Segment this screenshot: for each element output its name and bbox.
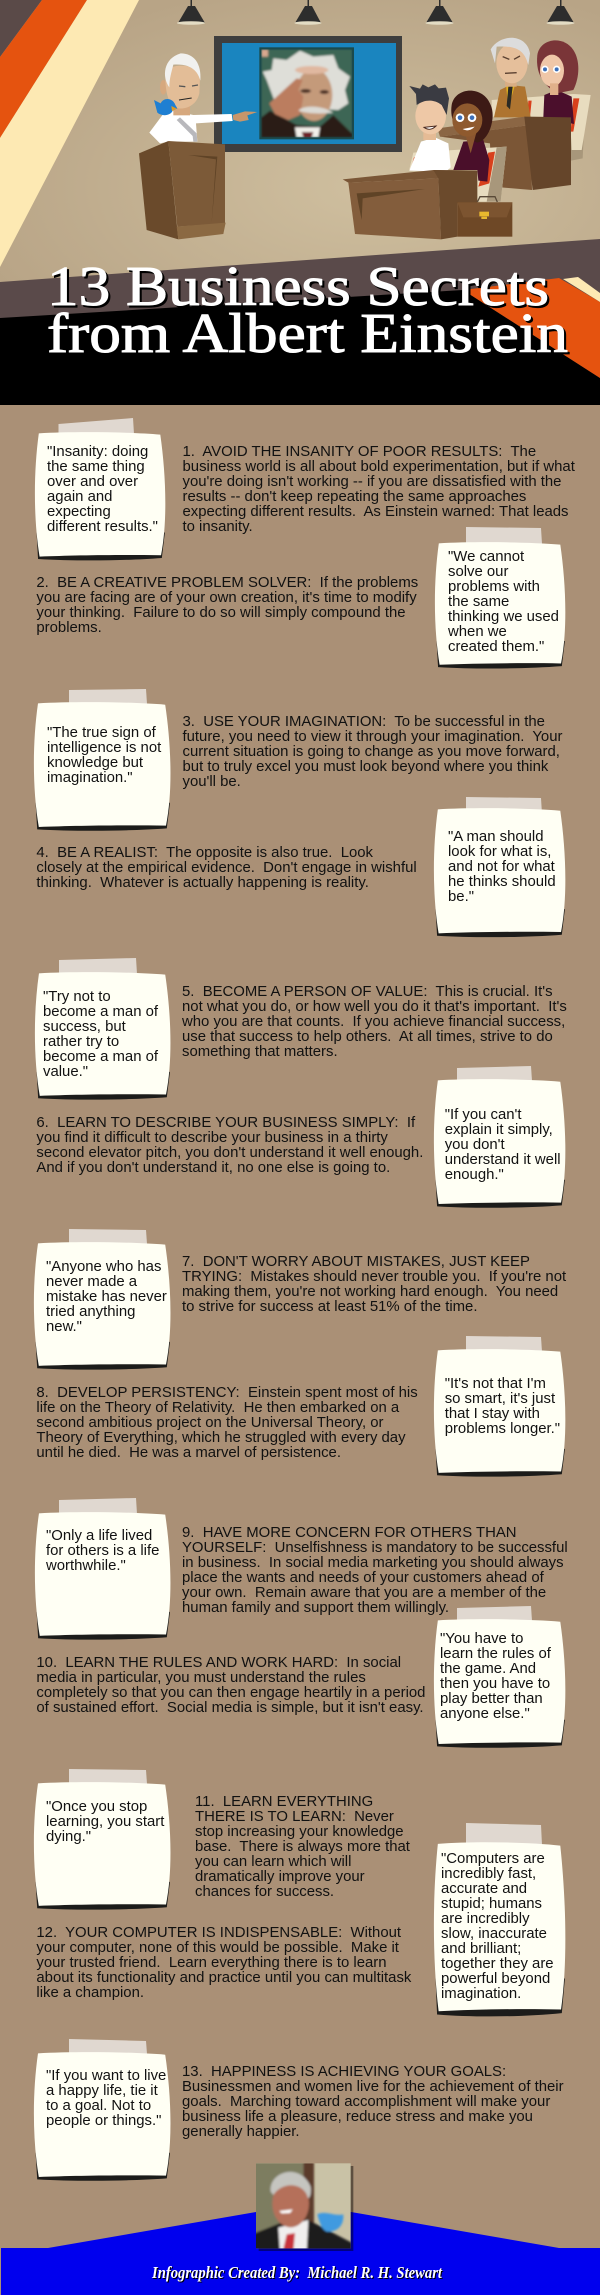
secret 4 text: 4. BE A REALIST: The opposite is also true. Look	[36, 845, 374, 861]
note: computers quote: accurate and	[441, 1881, 527, 1897]
secret 12 text: 12. YOUR COMPUTER IS INDISPENSABLE: Without	[36, 1925, 402, 1941]
secret 13 text: generally happier.	[182, 2124, 300, 2140]
note: computers quote: together they are	[441, 1956, 554, 1972]
secret 2 text: 2. BE A CREATIVE PROBLEM SOLVER: If the problems	[36, 575, 418, 591]
title	[47, 256, 570, 367]
secret 5 text: 5. BECOME A PERSON OF VALUE: This is crucial. It's	[182, 984, 553, 1000]
note: mistake quote: "Anyone who has	[46, 1259, 161, 1275]
back desk	[437, 117, 571, 190]
note: happy life quote: a happy life, tie it	[46, 2083, 159, 2099]
note: man of success quote: become a man of	[43, 1004, 159, 1020]
secret 11 text: dramatically improve your	[195, 1869, 365, 1885]
note: Insanity quote: "Insanity: doing	[47, 444, 148, 460]
secret 8 text: until he died. He was a marvel of persistence.	[36, 1445, 341, 1461]
secret 10 text: 10. LEARN THE RULES AND WORK HARD: In social	[36, 1655, 401, 1671]
young man	[409, 84, 451, 172]
note: true sign quote: imagination."	[47, 770, 133, 786]
secret 5 text: not what you do, or how well you do it that's important. It's	[182, 999, 567, 1015]
note: so smart quote: "It's not that I'm	[445, 1376, 546, 1392]
note: Insanity quote: again and	[47, 489, 112, 505]
note: computers quote: "Computers are	[441, 1851, 545, 1867]
presenter	[149, 53, 257, 143]
secret 9 text: in business. In social media marketing you should always	[182, 1555, 564, 1571]
note: Insanity quote	[35, 418, 165, 560]
secret 6 text: And if you don't understand it, no one else is going to.	[36, 1160, 390, 1176]
note: rules of the game quote: the game. And	[440, 1661, 536, 1677]
note: computers quote: powerful beyond	[441, 1971, 550, 1987]
note: so smart quote: problems longer."	[445, 1421, 560, 1437]
secret 9 text: 9. HAVE MORE CONCERN FOR OTHERS THAN	[182, 1525, 517, 1541]
note: happy life quote: people or things."	[46, 2113, 161, 2129]
note: man of success quote: become a man of	[43, 1049, 159, 1065]
note: happy life quote	[34, 2039, 170, 2181]
secret 6 text: you find it difficult to describe your business in a thirty	[36, 1130, 388, 1146]
note: happy life quote: to a goal. Not to	[46, 2098, 151, 2114]
note: life lived quote	[35, 1498, 170, 1640]
ceiling lamps	[177, 0, 574, 25]
secret 10 text: media in particular, you must understand the rules	[36, 1670, 366, 1686]
author photo	[256, 2163, 354, 2251]
secret 6 text: second elevator pitch, you don't understand it well enough.	[36, 1145, 423, 1161]
secret 13 text: 13. HAPPINESS IS ACHIEVING YOUR GOALS:	[182, 2064, 506, 2080]
note: computers quote: stupid; humans	[441, 1896, 542, 1912]
note: stop learning quote: learning, you start	[46, 1814, 165, 1830]
wall	[0, 0, 600, 300]
secret 5 text: something that matters.	[182, 1044, 338, 1060]
note: Insanity quote: the same thing	[47, 459, 145, 475]
presenter scene	[139, 47, 354, 239]
note: rules of the game quote: learn the rules of	[440, 1646, 552, 1662]
secret 3 text	[182, 714, 562, 790]
secret 7 text: TRYING: Mistakes should never trouble you. If you're not	[182, 1269, 567, 1285]
note: man should look quote: he thinks should	[448, 874, 556, 890]
audience scene	[343, 38, 591, 239]
secret 4 text	[36, 845, 417, 891]
secret 8 text: life on the Theory of Relativity. He then embarked on a	[36, 1400, 400, 1416]
note: stop learning quote: dying."	[46, 1829, 91, 1845]
note: We cannot quote: when we	[447, 624, 507, 640]
note: stop learning quote: "Once you stop	[46, 1799, 147, 1815]
note: man should look quote: look for what is,	[448, 844, 551, 860]
note: so smart quote: that I stay with	[445, 1406, 540, 1422]
note: true sign quote: "The true sign of	[47, 725, 157, 741]
secret 11 text: THERE IS TO LEARN: Never	[195, 1809, 394, 1825]
presentation screen	[214, 36, 402, 152]
secret 4 text: thinking. Whatever is actually happening is reality.	[36, 875, 369, 891]
note: mistake quote: new."	[46, 1319, 82, 1335]
front desk	[343, 170, 477, 239]
note: explain simply quote: understand it well	[445, 1152, 561, 1168]
secret 3 text: you'll be.	[182, 774, 241, 790]
note: man should look quote: be."	[448, 889, 474, 905]
note: We cannot quote: the same	[448, 594, 509, 610]
note: Insanity quote: expecting	[47, 504, 111, 520]
note: man of success quote: success, but	[43, 1019, 127, 1035]
note: true sign quote	[34, 689, 170, 831]
secret 8 text	[36, 1385, 418, 1461]
secret 1 text	[182, 444, 576, 535]
note: life lived quote: for others is a life	[46, 1543, 159, 1559]
note: mistake quote	[34, 1229, 170, 1370]
note: Insanity quote: different results."	[47, 519, 158, 535]
secret 9 text	[182, 1525, 568, 1616]
secret 1 text: results -- don't keep repeating the same approaches	[182, 489, 526, 505]
secret 2 text	[36, 575, 418, 636]
secret 13 text: goals. Marching toward accomplishment will make your	[182, 2094, 550, 2110]
secret 6 text: 6. LEARN TO DESCRIBE YOUR BUSINESS SIMPLY: If	[36, 1115, 416, 1131]
secret 3 text: but to truly excel you must look beyond where you think	[182, 759, 549, 775]
note: computers quote: incredibly fast,	[441, 1866, 536, 1882]
note: happy life quote: "If you want to live	[46, 2068, 166, 2084]
woman back row	[537, 40, 578, 124]
secret 12 text: about its functionality and practice until you can multitask	[36, 1970, 412, 1986]
secret 1 text: you're doing isn't working -- if you are dissatisfied with the	[182, 474, 561, 490]
secret 6 text	[36, 1115, 423, 1176]
note: computers quote: are incredibly	[441, 1911, 530, 1927]
front chair	[409, 147, 507, 202]
note: rules of the game quote: anyone else."	[440, 1706, 530, 1722]
secret 3 text: future, you need to view it through your imagination. Your	[182, 729, 562, 745]
note: mistake quote: tried anything	[46, 1304, 135, 1320]
secret 1 text: to insanity.	[182, 519, 253, 535]
note: man of success quote: "Try not to	[43, 989, 111, 1005]
note: explain simply quote	[434, 1066, 565, 1208]
note: explain simply quote: enough."	[445, 1167, 504, 1183]
secret 9 text: place the wants and needs of your customers ahead of	[182, 1570, 545, 1586]
note: man of success quote: value."	[43, 1064, 88, 1080]
header illustration	[0, 0, 600, 405]
secret 2 text: problems.	[36, 620, 102, 636]
note: man should look quote: and not for what	[448, 859, 556, 875]
secret 7 text: 7. DON'T WORRY ABOUT MISTAKES, JUST KEEP	[182, 1254, 530, 1270]
footer band	[1, 2212, 600, 2295]
secret 7 text	[182, 1254, 567, 1315]
secret 12 text	[36, 1925, 412, 2001]
note: rules of the game quote: then you have to	[440, 1676, 550, 1692]
secret 7 text: making them, you're not working hard enough. You need	[182, 1284, 558, 1300]
secret 11 text	[195, 1794, 411, 1900]
secret 5 text: use that success to help others. At all times, strive to do	[182, 1029, 553, 1045]
footer credit: Infographic Created By: Michael R. H. Stewart	[152, 2264, 444, 2283]
secret 13 text	[182, 2064, 564, 2140]
secret 10 text: of sustained effort. Social media is simple, but it isn't easy.	[36, 1700, 424, 1716]
secret 1 text: business world is all about bold experimentation, but if what	[182, 459, 576, 475]
secret 7 text: to strive for success at least 51% of the time.	[182, 1299, 477, 1315]
note: We cannot quote: thinking we used	[448, 609, 559, 625]
briefcase	[457, 197, 512, 237]
Einstein portrait	[259, 47, 354, 139]
title: from Albert Einstein	[47, 303, 568, 365]
note: true sign quote: knowledge but	[47, 755, 144, 771]
footer credit: Infographic Created By: Michael R. H. Stewart	[151, 2263, 443, 2282]
note: man should look quote: "A man should	[448, 829, 544, 845]
note: We cannot quote: "We cannot	[448, 549, 525, 565]
note: so smart quote: so smart, it's just	[445, 1391, 556, 1407]
secret 11 text: stop increasing your knowledge	[195, 1824, 404, 1840]
secret 1 text: 1. AVOID THE INSANITY OF POOR RESULTS: The	[182, 444, 536, 460]
note: computers quote: imagination.	[441, 1986, 521, 2002]
note: so smart quote	[434, 1336, 565, 1477]
secret 5 text	[181, 984, 567, 1060]
note: mistake quote: never made a	[46, 1274, 138, 1290]
secret 1 text: expecting different results. As Einstein warned: That leads	[182, 504, 568, 520]
note: We cannot quote	[435, 527, 565, 668]
note: rules of the game quote: "You have to	[440, 1631, 523, 1647]
secret 9 text: human family and support them willingly.	[182, 1600, 449, 1616]
secret 11 text: you can learn which will	[195, 1854, 351, 1870]
note: explain simply quote: you don't	[445, 1137, 506, 1153]
note: explain simply quote: explain it simply,	[445, 1122, 553, 1138]
diagonal stripes	[0, 0, 139, 267]
note: man of success quote: rather try to	[43, 1034, 119, 1050]
secret 11 text: 11. LEARN EVERYTHING	[195, 1794, 373, 1810]
secret 3 text: current situation is going to change as you move forward,	[182, 744, 560, 760]
woman front row	[451, 91, 493, 182]
back row chair	[492, 94, 591, 161]
note: We cannot quote: solve our	[448, 564, 508, 580]
secret 8 text: 8. DEVELOP PERSISTENCY: Einstein spent most of his	[36, 1385, 418, 1401]
secret 3 text: 3. USE YOUR IMAGINATION: To be successful in the	[182, 714, 545, 730]
secret 9 text: your own. Remain aware that you are a member of the	[182, 1585, 546, 1601]
title: 13 Business Secrets	[47, 256, 549, 318]
lectern	[139, 141, 226, 239]
secret 10 text	[36, 1655, 425, 1716]
secret 11 text: base. There is always more that	[195, 1839, 411, 1855]
older man	[491, 38, 531, 117]
note: mistake quote: mistake has never	[46, 1289, 167, 1305]
note: Insanity quote: over and over	[47, 474, 138, 490]
secret 11 text: chances for success.	[195, 1884, 334, 1900]
note: computers quote: and brilliant;	[441, 1941, 521, 1957]
secret 13 text: business life a pleasure, reduce stress and make you	[182, 2109, 533, 2125]
secret 8 text: second ambitious project on the Universal Theory, or	[36, 1415, 384, 1431]
note: computers quote	[434, 1823, 565, 2016]
secret 12 text: like a champion.	[36, 1985, 144, 2001]
secret 9 text: YOURSELF: Unselfishness is mandatory to be successful	[182, 1540, 568, 1556]
secret 10 text: completely so that you can then engage heartily in a period	[36, 1685, 425, 1701]
note: We cannot quote: created them."	[448, 639, 544, 655]
note: man should look quote	[434, 797, 565, 937]
note: true sign quote: intelligence is not	[47, 740, 162, 756]
note: rules of the game quote: play better than	[440, 1691, 543, 1707]
secret 8 text: Theory of Everything, which he struggled with every day	[36, 1430, 406, 1446]
note: We cannot quote: problems with	[448, 579, 540, 595]
note: computers quote: slow, inaccurate	[441, 1926, 547, 1942]
secret 2 text: your thinking. Failure to do so will simply compound the	[36, 605, 406, 621]
diagonal band	[0, 239, 600, 405]
note: explain simply quote: "If you can't	[445, 1107, 522, 1123]
note: rules of the game quote	[434, 1606, 565, 1748]
note: life lived quote: "Only a life lived	[46, 1528, 152, 1544]
secret 5 text: who you are that counts. If you achieve financial success,	[181, 1014, 565, 1030]
secret 13 text: Businessmen and women live for the achievement of their	[182, 2079, 564, 2095]
note: stop learning quote	[34, 1769, 170, 1910]
note: life lived quote: worthwhile."	[45, 1558, 126, 1574]
title: 13 Business Secrets	[49, 258, 551, 320]
secret 4 text: closely at the empirical evidence. Don't engage in wishful	[36, 860, 417, 876]
title: from Albert Einstein	[49, 305, 570, 367]
secret 12 text: your trusted friend. Learn everything there is to learn	[36, 1955, 387, 1971]
note: man of success quote	[35, 958, 170, 1100]
secret 12 text: your computer, none of this would be possible. Make it	[36, 1940, 400, 1956]
secret 2 text: you are facing are of your own creation, it's time to modify	[36, 590, 417, 606]
